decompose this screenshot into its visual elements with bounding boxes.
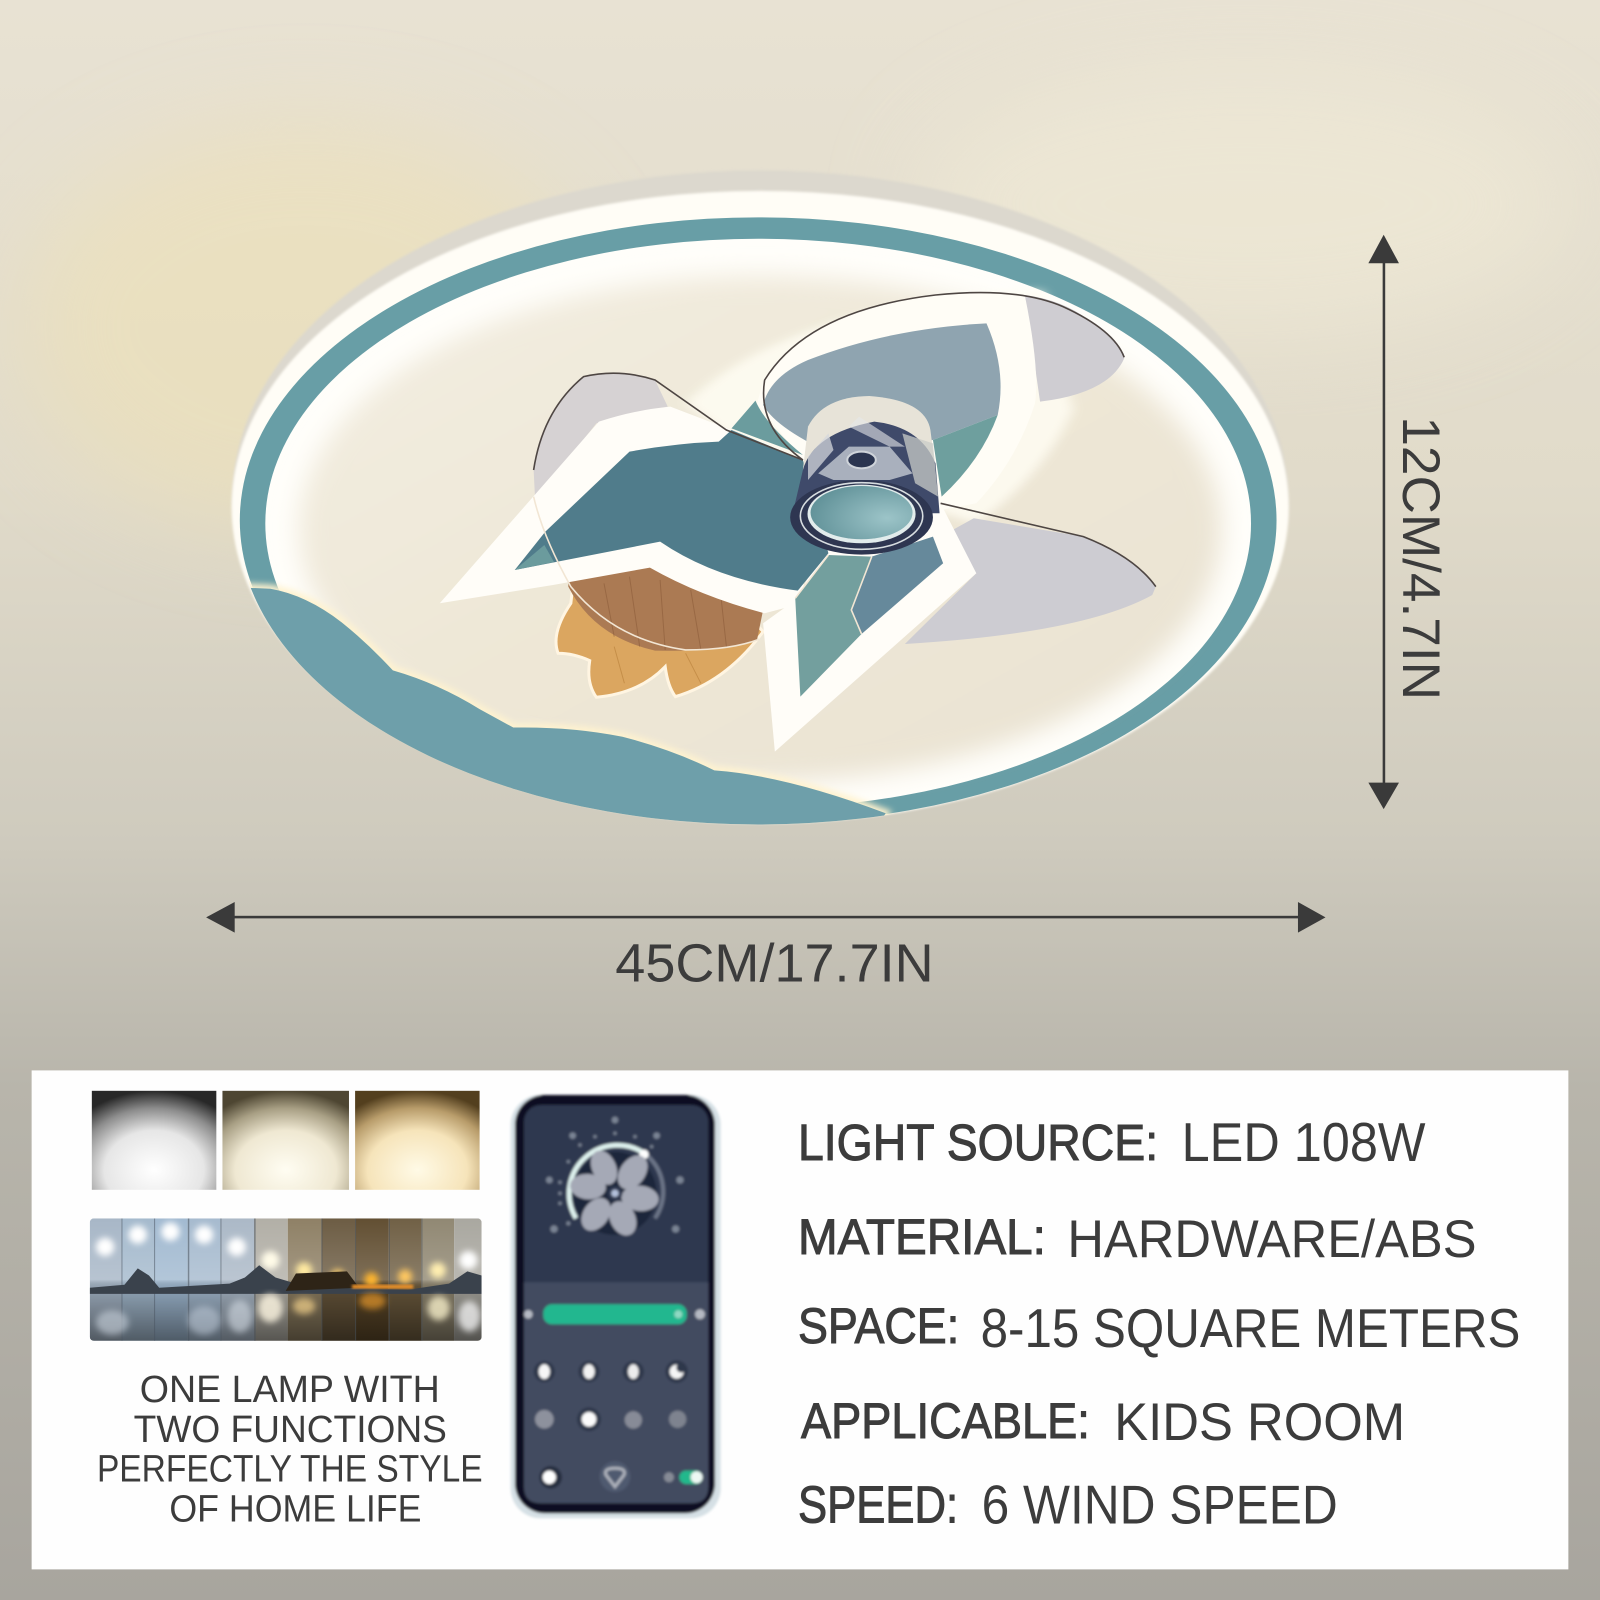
blade light edges [534,497,872,650]
teal cloud band [248,579,895,824]
spec: material: MATERIAL: [798,1209,1046,1265]
panel background [32,1070,1568,1569]
phone body [511,1095,721,1518]
dimming landscape strip [90,1218,482,1341]
rocket frame: left [440,407,808,613]
spec: space: SPACE: [798,1298,959,1354]
glow behind fan [686,290,1073,523]
caption: OF HOME LIFE [169,1487,421,1529]
horizon and mountains [90,1265,482,1294]
caption [97,1368,483,1529]
water reflections [96,1293,481,1335]
height dimension arrow [1368,235,1399,809]
spec: space [798,1297,1520,1359]
spec: applicable: KIDS ROOM [1114,1393,1405,1452]
width label: 45CM/17.7IN [615,934,934,994]
speed slider [524,1304,705,1324]
rocket nose: blue grey section [763,323,1001,457]
height label: 12CM/4.7IN [1391,416,1450,700]
colour temperature tiles [92,1091,480,1190]
rocket frame: upper [757,293,1036,510]
inner cream disc [299,276,1221,782]
caption: PERFECTLY THE STYLE [97,1448,483,1490]
teal ring [240,217,1277,823]
rocket fan [440,290,1156,752]
hub glass streaks [808,417,938,497]
blade outlines [534,293,1156,587]
inner white glow [265,239,1251,808]
spec: light source: LIGHT SOURCE: [798,1114,1158,1171]
fan hub [790,396,940,555]
tile: cool white [92,1091,216,1190]
suns [96,1222,478,1287]
specification panel [32,1070,1568,1569]
wooden flame body [568,567,763,651]
ceiling lamp [184,170,1289,857]
mode buttons [534,1360,688,1431]
wooden flame tips [556,570,763,697]
rocket nose: small teal section [732,401,803,455]
spec: light source [798,1111,1426,1173]
spec: speed: SPEED: [798,1476,958,1534]
fan dial [546,1117,684,1240]
specification list [798,1111,1520,1535]
tile: warm white [355,1091,480,1190]
caption: TWO FUNCTIONS [134,1408,447,1450]
spec: speed [798,1473,1338,1535]
bottom controls [539,1461,703,1492]
rocket frame: lower [763,503,976,752]
translucent blade: upper right [1025,295,1124,402]
phone screen [524,1105,708,1503]
rocket body: dark teal section [515,430,828,591]
spec: applicable [801,1393,1405,1452]
rocket lower: green section [795,555,872,697]
spec: speed: 6 WIND SPEED [982,1473,1338,1535]
rocket tail tip [515,545,554,570]
spec: material [798,1209,1477,1269]
lamp housing [233,170,1288,823]
caption: ONE LAMP WITH [140,1368,440,1410]
width dimension arrow [206,902,1326,933]
phone app [511,1095,721,1518]
rocket nose: green section [933,415,998,497]
white outer light ring [232,191,1289,823]
tile: neutral white [222,1091,349,1190]
spec: light source: LED 108W [1182,1111,1426,1173]
spec: material: HARDWARE/ABS [1067,1210,1477,1269]
rocket lower: grey section [851,537,943,634]
translucent blade: right [905,518,1156,644]
spec: applicable: APPLICABLE: [801,1393,1090,1449]
column dividers [121,1218,422,1341]
translucent blade: left [534,373,668,500]
spec: space: 8-15 SQUARE METERS [981,1297,1520,1359]
wood grain [604,577,726,683]
